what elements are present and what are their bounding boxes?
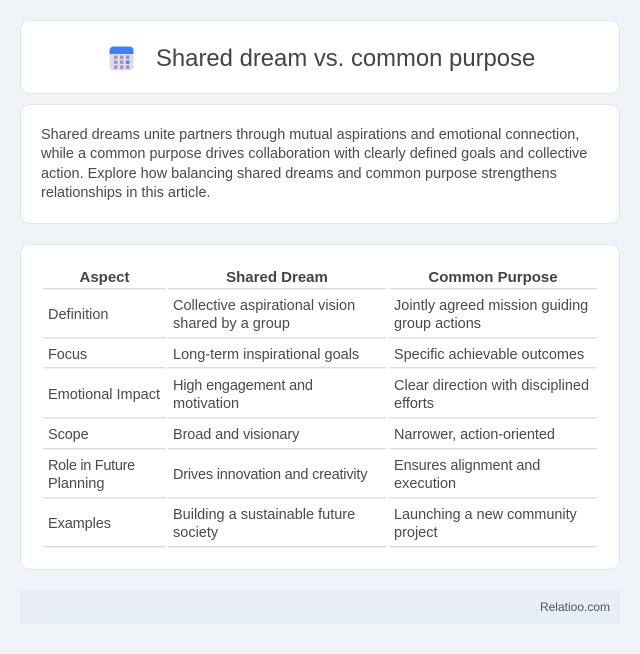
comparison table: Narrower, action-oriented bbox=[394, 427, 555, 443]
header: shared dream: Shared Dream bbox=[226, 269, 328, 286]
comparison table: Ensures alignment and bbox=[394, 458, 540, 474]
row: emotional impact: Emotional Impact bbox=[48, 387, 160, 403]
intro panel bbox=[20, 104, 620, 224]
comparison table: project bbox=[394, 525, 438, 541]
comparison table: Broad and visionary bbox=[173, 427, 299, 443]
comparison table: Specific achievable outcomes bbox=[394, 347, 584, 363]
intro text: action. Explore how balancing shared dreams and common purpose strengthens bbox=[41, 166, 557, 182]
intro text: relationships in this article. bbox=[41, 185, 210, 201]
comparison table: motivation bbox=[173, 396, 239, 412]
comparison table: Collective aspirational vision bbox=[173, 298, 355, 314]
intro text: Shared dreams unite partners through mutual aspirations and emotional connection, bbox=[41, 126, 579, 142]
intro text bbox=[41, 126, 587, 201]
intro text: while a common purpose drives collaboration with clearly defined goals and collective bbox=[41, 146, 587, 162]
comparison table: efforts bbox=[394, 396, 434, 412]
table panel bbox=[20, 244, 620, 570]
comparison table: Long-term inspirational goals bbox=[173, 347, 359, 363]
icon: calendar bbox=[110, 46, 134, 70]
header: aspect: Aspect bbox=[79, 269, 130, 286]
footer text: Relatioo.com bbox=[540, 600, 610, 614]
comparison table: High engagement and bbox=[173, 378, 313, 394]
row: focus: Focus bbox=[48, 347, 87, 363]
row: examples: Examples bbox=[48, 516, 111, 532]
comparison table: shared by a group bbox=[173, 316, 290, 332]
header: common purpose: Common Purpose bbox=[428, 269, 558, 286]
footer bar bbox=[20, 590, 620, 624]
comparison table: Jointly agreed mission guiding bbox=[394, 298, 588, 314]
row: role in future planning: Role in Future bbox=[48, 458, 135, 474]
comparison table: execution bbox=[394, 476, 456, 492]
comparison table: group actions bbox=[394, 316, 481, 332]
row: definition: Definition bbox=[48, 307, 108, 323]
comparison table: Clear direction with disciplined bbox=[394, 378, 589, 394]
comparison table: Building a sustainable future bbox=[173, 507, 355, 523]
title panel bbox=[20, 20, 620, 94]
title: Shared dream vs. common purpose bbox=[156, 45, 535, 72]
row: role in future planning bbox=[48, 458, 135, 492]
comparison table: Drives innovation and creativity bbox=[173, 467, 367, 483]
row: scope: Scope bbox=[48, 427, 89, 443]
comparison table: Launching a new community bbox=[394, 507, 577, 523]
row: role in future planning: Planning bbox=[48, 476, 104, 492]
comparison table: society bbox=[173, 525, 218, 541]
